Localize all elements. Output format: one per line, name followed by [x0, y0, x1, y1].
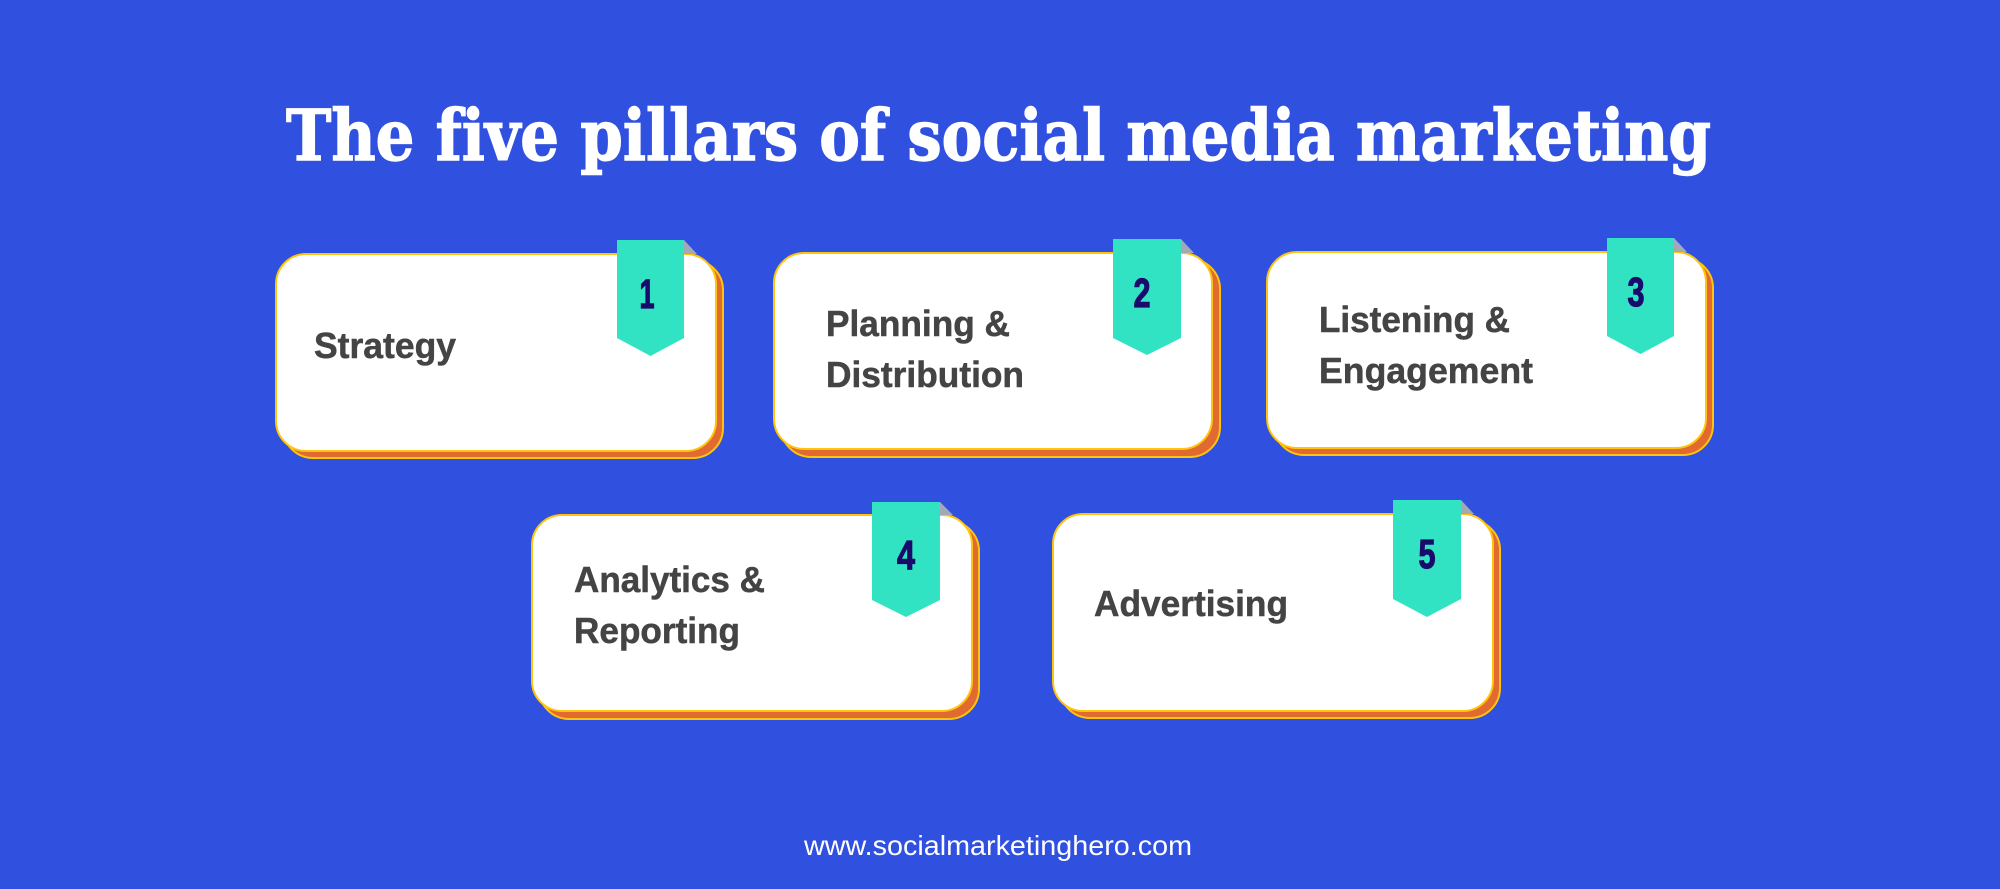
number 2: 2 [1134, 270, 1150, 316]
label: Listening & Engagement: Listening & [1319, 299, 1510, 340]
label: Analytics & Reporting [574, 559, 765, 651]
icon: ribbon 4 [872, 502, 940, 617]
panel: card 2 Planning & Distribution [774, 239, 1220, 457]
label: Planning & Distribution: Distribution [826, 354, 1024, 395]
label: Planning & Distribution: Planning & [826, 303, 1010, 344]
number 5: 5 [1418, 531, 1436, 577]
icon: ribbon fold 5 [1461, 500, 1474, 514]
label: Analytics & Reporting: Reporting [574, 610, 740, 651]
number 3: 3 [1628, 269, 1644, 315]
title: The five pillars of social media marketing [286, 94, 1711, 177]
label: Planning & Distribution [826, 303, 1024, 395]
panel: card 4 Analytics & Reporting [532, 502, 979, 719]
icon: ribbon fold 4 [940, 502, 953, 515]
icon: ribbon 1 [617, 240, 684, 356]
icon: ribbon 5 [1393, 500, 1461, 617]
label: Analytics & Reporting: Analytics & [574, 559, 765, 600]
icon: ribbon 3 [1607, 238, 1674, 354]
label: Listening & Engagement [1319, 299, 1533, 391]
label: Strategy: Strategy [314, 325, 456, 366]
number 4: 4 [897, 532, 915, 578]
icon: ribbon fold 2 [1181, 239, 1194, 253]
panel: card 1 Strategy [276, 240, 723, 458]
footer website: www.socialmarketinghero.com [803, 830, 1192, 861]
label: Listening & Engagement: Engagement [1319, 350, 1533, 391]
icon: ribbon fold 1 [684, 240, 697, 254]
panel: card 5 Advertising [1053, 500, 1500, 718]
number 1: 1 [640, 271, 654, 317]
icon: ribbon 2 [1113, 239, 1181, 355]
panel: card 3 Listening & Engagement [1267, 238, 1713, 455]
icon: ribbon fold 3 [1674, 238, 1687, 252]
label: Advertising: Advertising [1094, 583, 1288, 624]
